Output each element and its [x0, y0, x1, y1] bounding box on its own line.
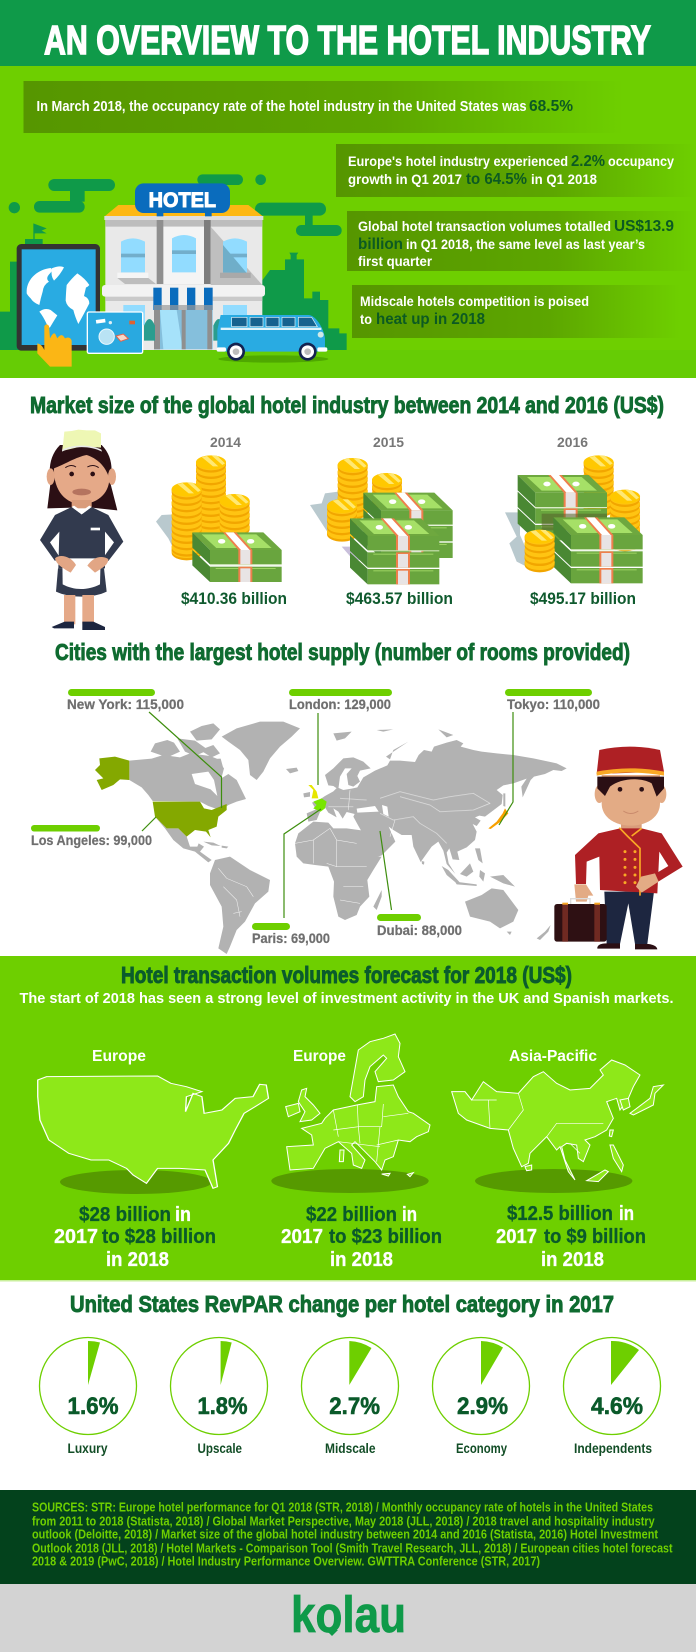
value: 2016: $495.17 billion: [530, 590, 636, 608]
value: column 2: 2017: [281, 1226, 323, 1248]
icon: blue van: [217, 315, 328, 363]
chart: Independents: [564, 1338, 660, 1456]
column: Asia-Pacific map: [452, 1048, 663, 1271]
icon: tablet with globe: [17, 244, 100, 351]
chart: Independents: 4.6%: [591, 1393, 643, 1420]
callout: Europe occupancy: Europe's hotel industry experienced: [348, 153, 568, 169]
highlighted UK: [308, 785, 318, 798]
icon: map card: [87, 312, 143, 353]
chart: Midscale: Midscale: [325, 1440, 376, 1456]
panel: hero overview: [0, 66, 696, 378]
value: column 3: $12.5 billion: [507, 1203, 613, 1225]
illustration: maid: [40, 430, 123, 630]
icon: city silhouette: [0, 223, 347, 350]
heading: transaction volumes: Hotel transaction volumes forecast for 2018 (US$): [121, 962, 572, 988]
callout: US occupancy: [24, 81, 624, 133]
chart: Upscale: Upscale: [198, 1440, 242, 1456]
map label: London: London: 129,000: [289, 696, 391, 712]
connector lines: [142, 712, 513, 918]
value: 2015: $463.57 billion: [346, 590, 453, 608]
callout: midscale hotels: Midscale hotels competition is poised: [360, 293, 589, 309]
icon: coins and banknotes 2016: [505, 455, 643, 583]
chart: Midscale: [302, 1338, 398, 1456]
value: column 3: in: [619, 1203, 634, 1225]
chart: market size 2016: [505, 434, 643, 608]
icon: hotel sign: [135, 183, 230, 216]
value: 2014: $410.36 billion: [181, 590, 287, 608]
callout: Europe occupancy: to 64.5%: [466, 171, 527, 188]
map label: Los Angeles: Los Angeles: 99,000: [31, 832, 152, 848]
chart: Economy: Economy: [456, 1440, 507, 1456]
header banner: [0, 0, 696, 66]
panel: sources: 2018 & 2019 (PwC, 2018) / Hotel Industry Performance Overview. GWTTRA Conference (STR, 2017): [32, 1555, 540, 1569]
callout: US occupancy: In March 2018, the occupancy rate of the hotel industry in the United States was: [36, 99, 526, 115]
map label: Paris: Paris: 69,000: [252, 930, 330, 946]
label: column 3 region: Asia-Pacific: [509, 1048, 597, 1065]
callout: global transaction volumes: Global hotel transaction volumes totalled: [358, 218, 611, 234]
highlighted Alaska and USA: [95, 757, 227, 837]
label: year 2016: 2016: [557, 434, 588, 450]
logo: kolau: kolau: [291, 1586, 406, 1643]
country borders: [218, 790, 490, 917]
heading: RevPAR: United States RevPAR change per hotel category in 2017: [70, 1291, 614, 1317]
value: column 2: $22 billion: [306, 1204, 397, 1226]
callout: global transaction volumes: billion: [358, 236, 403, 253]
icon: hotel building: [102, 183, 265, 350]
icon: hotel sign: HOTEL: [149, 188, 216, 212]
inland seas: [192, 772, 389, 817]
world map: [95, 722, 567, 954]
chart: Midscale: 2.7%: [329, 1393, 380, 1420]
value: column 1: in: [175, 1204, 191, 1226]
map label: Paris: [252, 923, 330, 946]
callout: midscale hotels: [352, 285, 680, 338]
label: year 2015: 2015: [373, 434, 404, 450]
footer with logo: [0, 1584, 696, 1652]
value: column 2: in 2018: [330, 1249, 393, 1271]
callout: Europe occupancy: 2.2%: [571, 153, 605, 170]
subtitle: The start of 2018 has seen a strong level of investment activity in the UK and Spanish markets.: [20, 990, 674, 1007]
illustration: bellboy: [554, 747, 683, 949]
callout: global transaction volumes: US$13.9: [614, 218, 674, 235]
map label: Tokyo: [505, 689, 600, 712]
value: column 1: in 2018: [106, 1249, 169, 1271]
column: Europe map: [271, 1034, 442, 1271]
value: column 2: [281, 1204, 442, 1271]
label: year 2014: 2014: [210, 434, 241, 450]
highlighted Japan: [488, 808, 508, 829]
chart: Upscale: 1.8%: [198, 1393, 248, 1420]
value: column 3: 2017: [496, 1226, 537, 1248]
callout: midscale hotels: to: [360, 311, 372, 327]
icon: coins and banknotes 2015: [310, 458, 453, 584]
map label: London: [289, 689, 392, 712]
map label: Dubai: [377, 914, 462, 938]
callout: global transaction volumes: first quarter: [358, 253, 433, 269]
map: Europe: [286, 1034, 430, 1177]
map label: New York: [67, 689, 184, 712]
map label: Los Angeles: [31, 825, 152, 848]
chart: Luxury: [40, 1338, 136, 1456]
chart: Economy: [432, 1338, 530, 1456]
label: column 1 region: Europe: [92, 1048, 146, 1065]
chart: Economy: 2.9%: [457, 1393, 508, 1420]
map label: Tokyo: Tokyo: 110,000: [507, 696, 600, 712]
illustration: hotel scene: [0, 174, 347, 367]
callout: Europe occupancy: occupancy: [608, 153, 674, 169]
chart: market size 2014: [156, 434, 287, 608]
icon: clouds: [9, 174, 342, 236]
chart: Independents: Independents: [574, 1440, 652, 1456]
panel: sources: [0, 1490, 696, 1584]
value: column 2: in: [402, 1204, 417, 1226]
icon: coins and banknotes 2014: [156, 455, 282, 582]
Greenland: [222, 722, 300, 780]
callout: midscale hotels: heat up in 2018: [376, 311, 485, 328]
map label: New York: New York: 115,000: [67, 696, 184, 712]
value: column 1: [54, 1204, 216, 1271]
chart: Luxury: 1.6%: [68, 1393, 118, 1420]
icon: pointing hand: [37, 324, 72, 367]
value: column 1: $28 billion: [79, 1204, 171, 1226]
panel: transaction forecast: [0, 956, 696, 1282]
chart: Upscale: [170, 1338, 268, 1456]
callout: Europe occupancy: [336, 144, 696, 197]
label: column 2 region: Europe: [293, 1048, 346, 1065]
callout: Europe occupancy: in Q1 2018: [531, 171, 597, 187]
value: column 1: to $28 billion: [102, 1226, 216, 1248]
map: United States: [38, 1076, 268, 1188]
map label: Dubai: Dubai: 88,000: [377, 922, 462, 938]
value: column 2: to $23 billion: [329, 1226, 442, 1248]
map: Asia-Pacific: [452, 1060, 663, 1182]
callout: US occupancy: 68.5%: [529, 98, 573, 115]
value: column 3: in 2018: [541, 1249, 604, 1271]
chart: Luxury: Luxury: [68, 1440, 108, 1456]
chart: market size 2015: [310, 434, 453, 608]
value: column 3: to $9 billion: [544, 1226, 646, 1248]
highlighted France: [313, 798, 327, 812]
value: column 3: [496, 1203, 646, 1271]
value: column 1: 2017: [54, 1226, 98, 1248]
callout: Europe occupancy: growth in Q1 2017: [348, 171, 462, 187]
callout: global transaction volumes: [347, 211, 696, 271]
callout: global transaction volumes: in Q1 2018, the same level as last year’s: [406, 236, 645, 252]
column: US map: [38, 1048, 268, 1271]
